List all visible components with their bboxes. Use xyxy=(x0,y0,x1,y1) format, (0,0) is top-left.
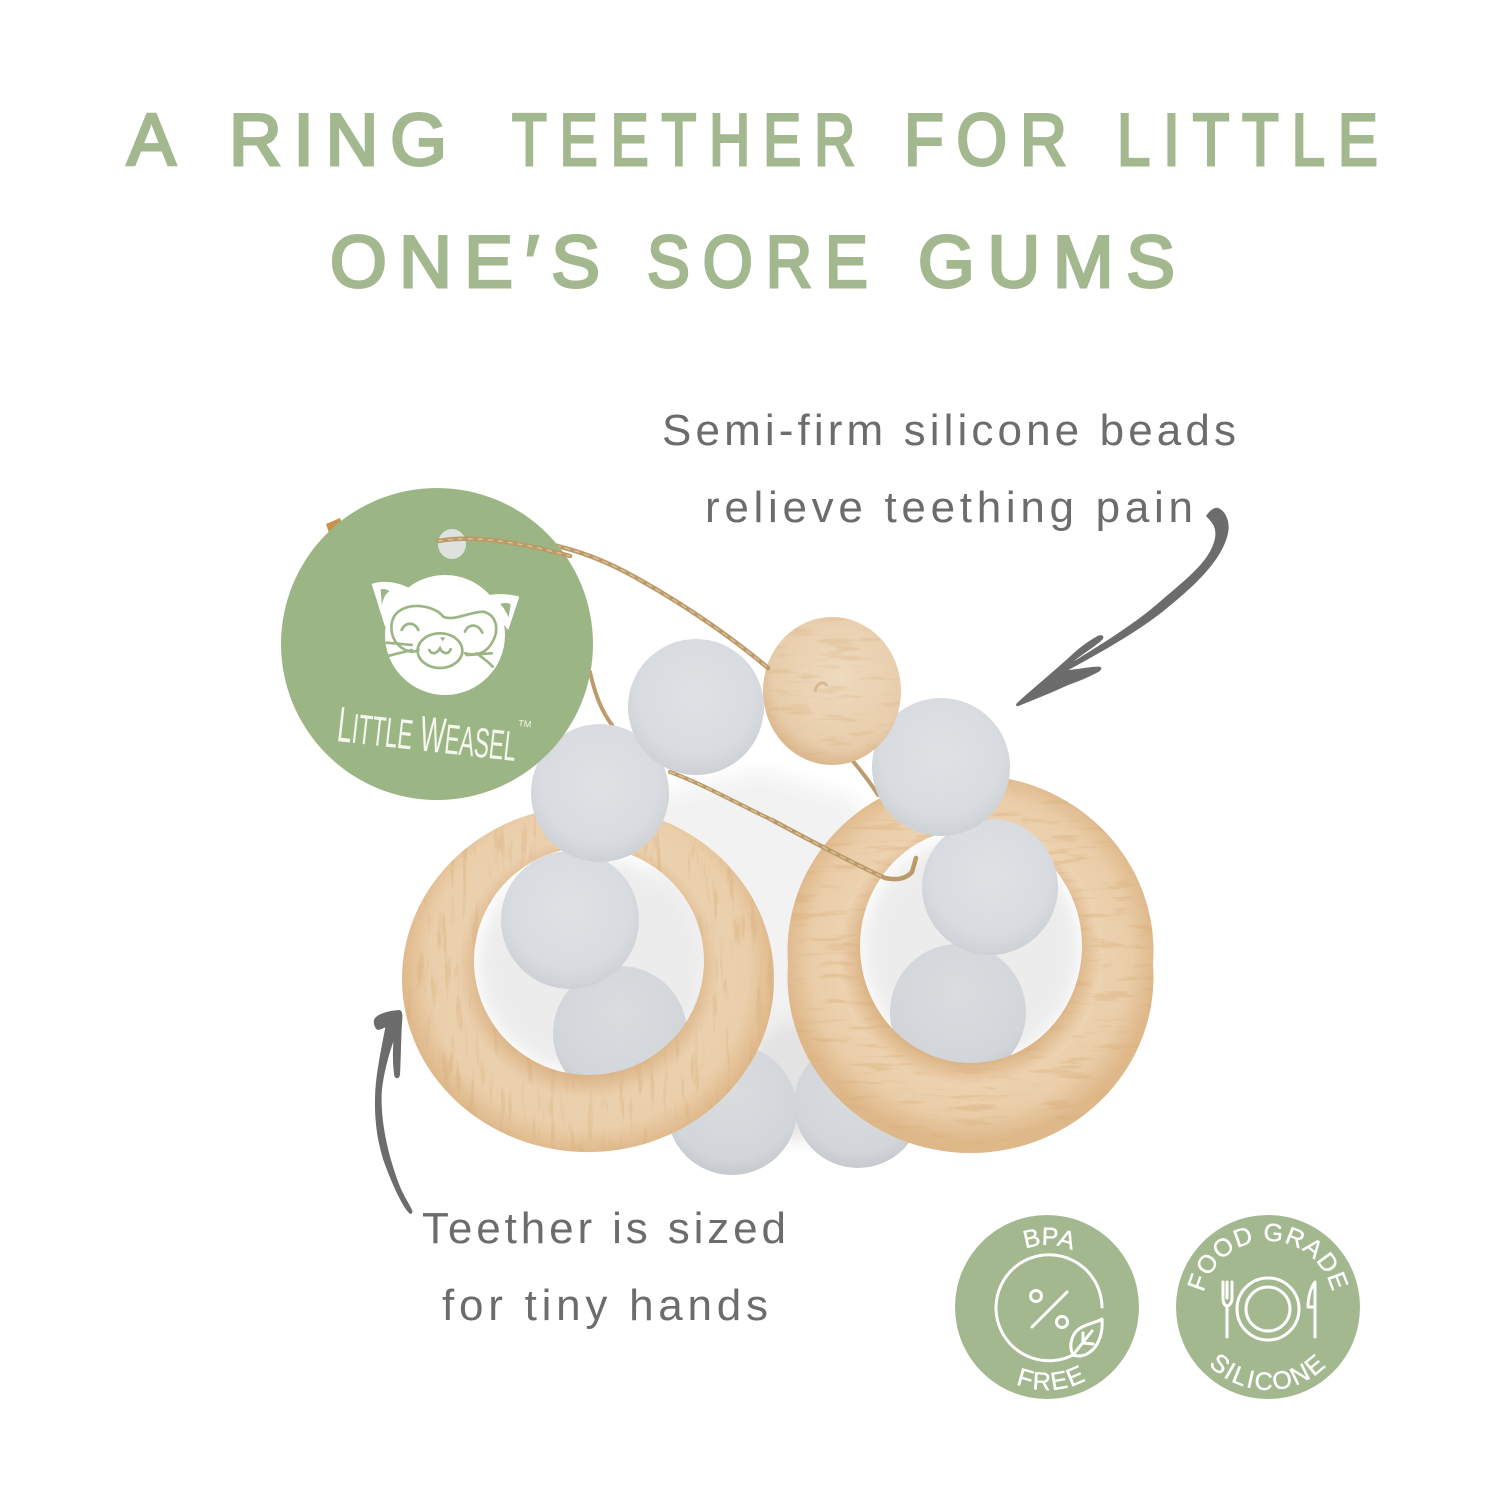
title: RING xyxy=(229,100,447,181)
string: back strand xyxy=(590,672,878,795)
wooden bead xyxy=(760,615,905,770)
product shadow backdrop xyxy=(478,770,1080,1140)
callout: silicone beads xyxy=(662,406,1236,532)
callout: silicone beads: Semi-firm silicone beads xyxy=(662,406,1236,455)
title: ONE′S xyxy=(330,222,600,303)
arrow: to beads xyxy=(1016,508,1229,706)
icon: percent in circle with leaf xyxy=(996,1255,1102,1361)
ferret logo xyxy=(372,575,519,695)
badge: food grade silicone xyxy=(1176,1215,1360,1399)
badge: BPA free: BPA xyxy=(1023,1227,1072,1250)
callout: sized for tiny hands xyxy=(422,1204,786,1330)
wooden ring: right xyxy=(785,775,1157,1153)
icon: plate, fork and knife xyxy=(1223,1278,1315,1340)
title: SORE xyxy=(647,221,868,303)
brand name: LITTLE WEASEL xyxy=(335,696,520,772)
badge: food grade silicone: SILICONE xyxy=(1210,1354,1326,1390)
badge: BPA free: FREE xyxy=(1017,1365,1086,1390)
callout: sized for tiny hands: Teether is sized xyxy=(422,1204,786,1253)
badge: food grade silicone: FOOD GRADE xyxy=(1187,1224,1348,1291)
hang tag: TM xyxy=(518,718,532,729)
wooden ring: left xyxy=(400,800,780,1160)
title: FOR xyxy=(904,98,1067,181)
callout: silicone beads: relieve teething pain xyxy=(705,483,1193,532)
beads: in front of the rings xyxy=(501,639,1058,989)
title: LITTLE xyxy=(1117,100,1378,181)
title xyxy=(127,98,1378,303)
badge: BPA free xyxy=(955,1215,1139,1399)
hang tag xyxy=(281,488,593,800)
arrow: to ring xyxy=(374,1010,412,1214)
callout: sized for tiny hands: for tiny hands xyxy=(442,1281,768,1330)
title: TEETHER xyxy=(512,99,855,181)
beads: behind the rings xyxy=(553,944,1026,1175)
title: GUMS xyxy=(918,222,1175,303)
string: loop over the beads and ring xyxy=(446,538,916,879)
tag hole xyxy=(438,529,570,559)
title: A xyxy=(127,100,176,181)
